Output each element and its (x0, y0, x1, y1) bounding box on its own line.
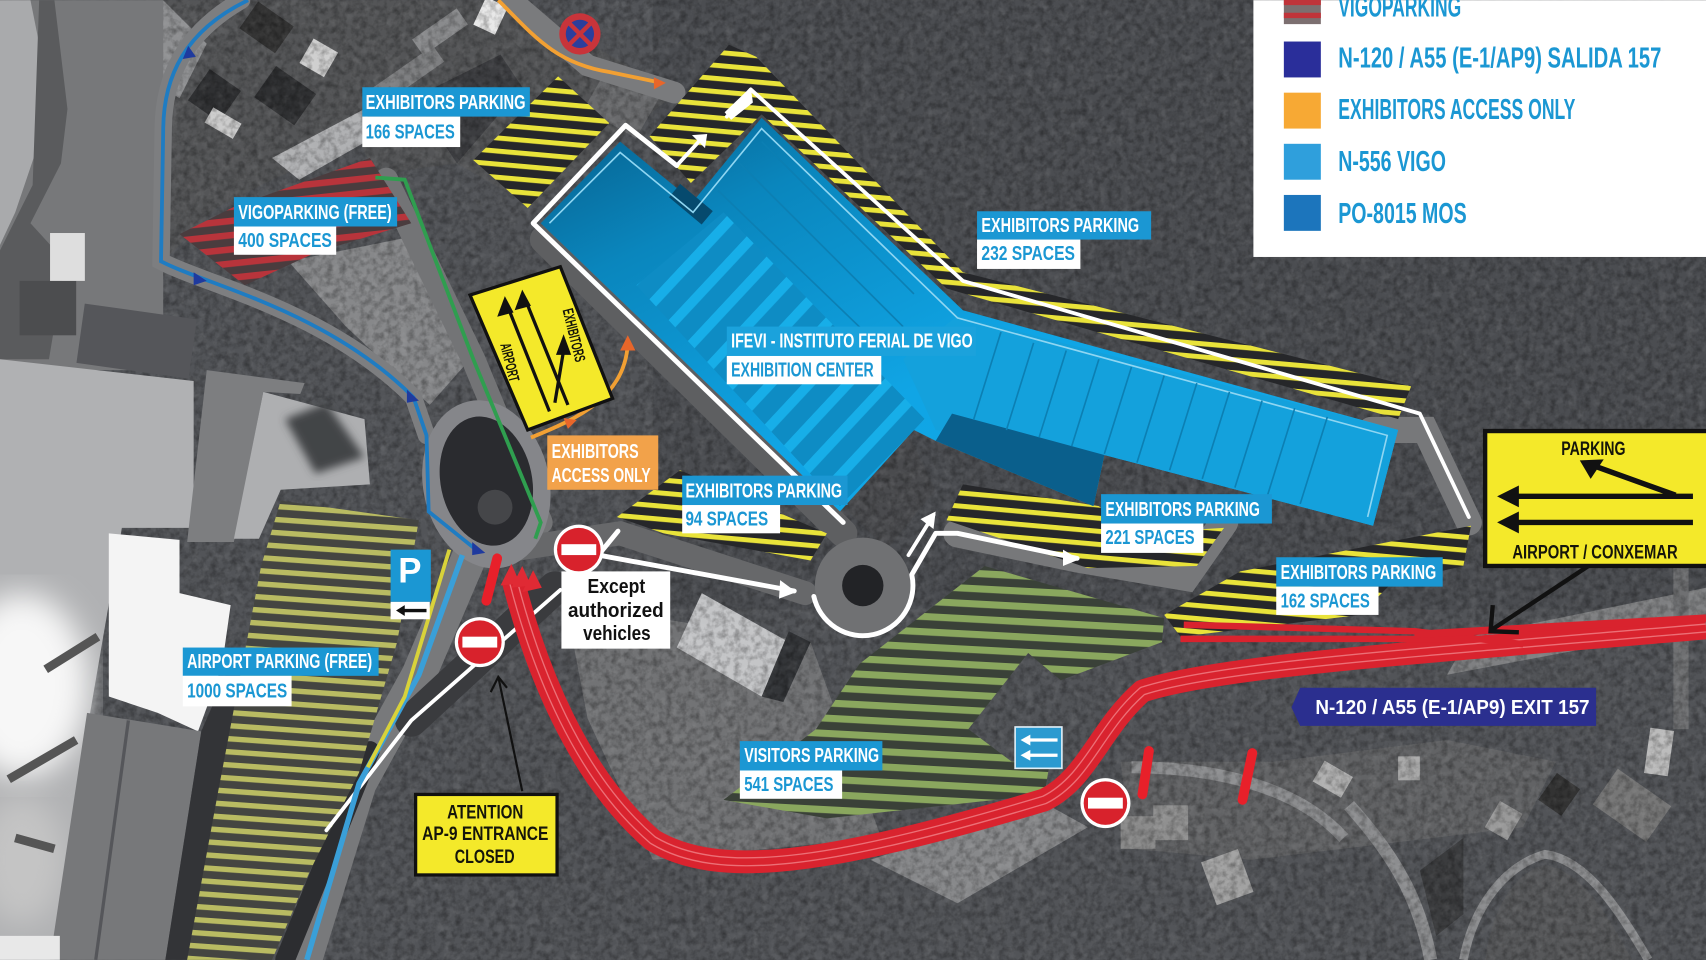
label: exhibitors parking 166 (362, 87, 530, 147)
thick black arrow from sign (1491, 566, 1588, 632)
label: IFEVI exhibition center: EXHIBITION CENTER (731, 359, 874, 382)
label: IFEVI exhibition center (727, 327, 976, 384)
label: exhibitors parking 162: EXHIBITORS PARKING (1281, 561, 1436, 584)
label: exhibitors parking 221 (1101, 494, 1272, 553)
label: exhibitors parking 162 (1276, 557, 1443, 615)
legend: N-556 (1284, 144, 1446, 180)
sign: AP-9 entrance closed: AP-9 ENTRANCE (422, 823, 548, 845)
label: vigoparking free 400 (234, 197, 397, 255)
red route arrowheads (500, 564, 542, 592)
route: exit arrow (908, 515, 934, 555)
label: airport parking free 1000: AIRPORT PARKING (FREE) (187, 650, 372, 673)
label: exhibitors parking 94 (682, 476, 848, 533)
route: around the building (533, 125, 843, 522)
label: visitors parking 541: 541 SPACES (744, 773, 833, 796)
parking zone: exhibitors 94 (617, 470, 827, 561)
label: vigoparking free 400: VIGOPARKING (FREE) (238, 201, 392, 224)
legend panel (1253, 0, 1706, 257)
label: exhibitors parking 166: 166 SPACES (366, 120, 455, 143)
legend: vigoparking (1284, 0, 1461, 24)
roundabout east (815, 538, 911, 633)
legend: N-120 (1284, 42, 1661, 77)
note: except authorized vehicles: Except (588, 575, 645, 598)
thin black arrow to AP-9 (491, 677, 522, 791)
area: car park (288, 234, 470, 405)
blue route PO-8015 (161, 0, 479, 552)
note: except authorized vehicles: vehicles (583, 622, 651, 645)
no-entry sign 2 (455, 617, 505, 667)
area: top-left airfield (0, 0, 197, 379)
label: exhibitors access only: EXHIBITORS (552, 440, 639, 463)
label: exhibitors parking 166: EXHIBITORS PARKING (366, 91, 526, 114)
roundabout oval (407, 388, 566, 580)
label: airport parking free 1000: 1000 SPACES (187, 680, 287, 703)
area: village (87, 0, 677, 283)
route: roundabout ring (814, 533, 1077, 636)
legend: PO-8015: PO-8015 MOS (1338, 197, 1467, 229)
area: central buildings (677, 435, 936, 702)
label: visitors parking 541 (740, 741, 882, 799)
sign: yellow rotated lanes: AIRPORT (496, 341, 522, 384)
sign: yellow rotated lanes (470, 267, 613, 430)
label: exhibitors parking 221: EXHIBITORS PARKING (1105, 498, 1260, 521)
label: exhibitors parking 94: EXHIBITORS PARKING (685, 479, 842, 502)
parking zone: exhibitors 162 (1164, 526, 1471, 637)
parking zone: exhibitors 166 (473, 76, 609, 208)
sign: AP-9 entrance closed (416, 794, 557, 875)
area: upper road right (1447, 566, 1706, 729)
sign: yellow rotated lanes: EXHIBITORS (559, 307, 588, 364)
sign: parking airport conxemar (1485, 431, 1706, 566)
sign: AP-9 entrance closed: ATENTION (447, 801, 523, 823)
area: terminal (0, 533, 245, 960)
label: exhibitors access only: ACCESS ONLY (552, 464, 651, 487)
legend: exhibitors access (1284, 93, 1576, 129)
parking zone: visitors (724, 566, 1164, 818)
route: lower white line (326, 590, 560, 830)
label: exhibitors parking 232 (977, 211, 1151, 269)
orange route top (498, 0, 662, 83)
sign: lane arrows blue (1015, 727, 1062, 768)
legend: N-556: N-556 VIGO (1338, 145, 1446, 177)
orange arrowheads (564, 77, 666, 429)
legend: PO-8015 (1284, 195, 1467, 231)
light-blue route N-556 (307, 555, 462, 960)
area: central lot (566, 604, 881, 860)
label: N-120 exit 157: N-120 / A55 (E-1/AP9) EXIT 157 (1315, 696, 1590, 719)
label: exhibitors parking 232: 232 SPACES (981, 242, 1075, 265)
blue arrowheads (183, 46, 485, 555)
no-entry sign 3 (1080, 778, 1130, 828)
label: airport parking free 1000 (183, 648, 379, 706)
no-entry sign 1 (554, 525, 604, 575)
parking zone: exhibitors 221 (947, 484, 1224, 568)
note: except authorized vehicles (561, 571, 670, 649)
red route N-120 (514, 582, 1706, 862)
sign: AP-9 entrance closed: CLOSED (455, 846, 515, 868)
sign: P parking: P (398, 551, 421, 590)
label: N-120 exit 157 (1291, 688, 1596, 726)
white arrowheads (692, 87, 1079, 599)
label: exhibitors parking 232: EXHIBITORS PARKING (981, 214, 1139, 237)
exhibition center building (541, 118, 1398, 526)
label: exhibitors parking 221: 221 SPACES (1105, 526, 1195, 549)
sign: P parking (391, 550, 431, 619)
area: apron (0, 359, 194, 960)
label: exhibitors access only (547, 435, 658, 490)
label: exhibitors parking 94: 94 SPACES (685, 508, 768, 531)
green route (375, 178, 541, 539)
parking zone: airport (187, 501, 419, 960)
sign: parking airport conxemar: PARKING (1561, 438, 1625, 460)
no-parking sign (559, 13, 601, 55)
main roads (161, 0, 1469, 960)
parking zone: vigoparking (180, 158, 411, 285)
note: except authorized vehicles: authorized (568, 599, 664, 622)
red closure bars (486, 558, 1252, 800)
white access route (326, 89, 1469, 830)
area: fields below the road (870, 728, 1674, 960)
yellow route (368, 550, 449, 767)
label: visitors parking 541: VISITORS PARKING (744, 744, 879, 767)
label: IFEVI exhibition center: IFEVI - INSTITUTO FERIAL DE VIGO (731, 329, 973, 352)
route: from closed entrance (598, 531, 794, 591)
orange route lower (531, 343, 628, 438)
label: vigoparking free 400: 400 SPACES (238, 229, 332, 252)
label: exhibitors parking 162: 162 SPACES (1281, 589, 1370, 612)
parking zone: exhibitors 232 (650, 45, 1411, 419)
route: to north side (677, 89, 1469, 517)
area: hangars (187, 370, 370, 542)
